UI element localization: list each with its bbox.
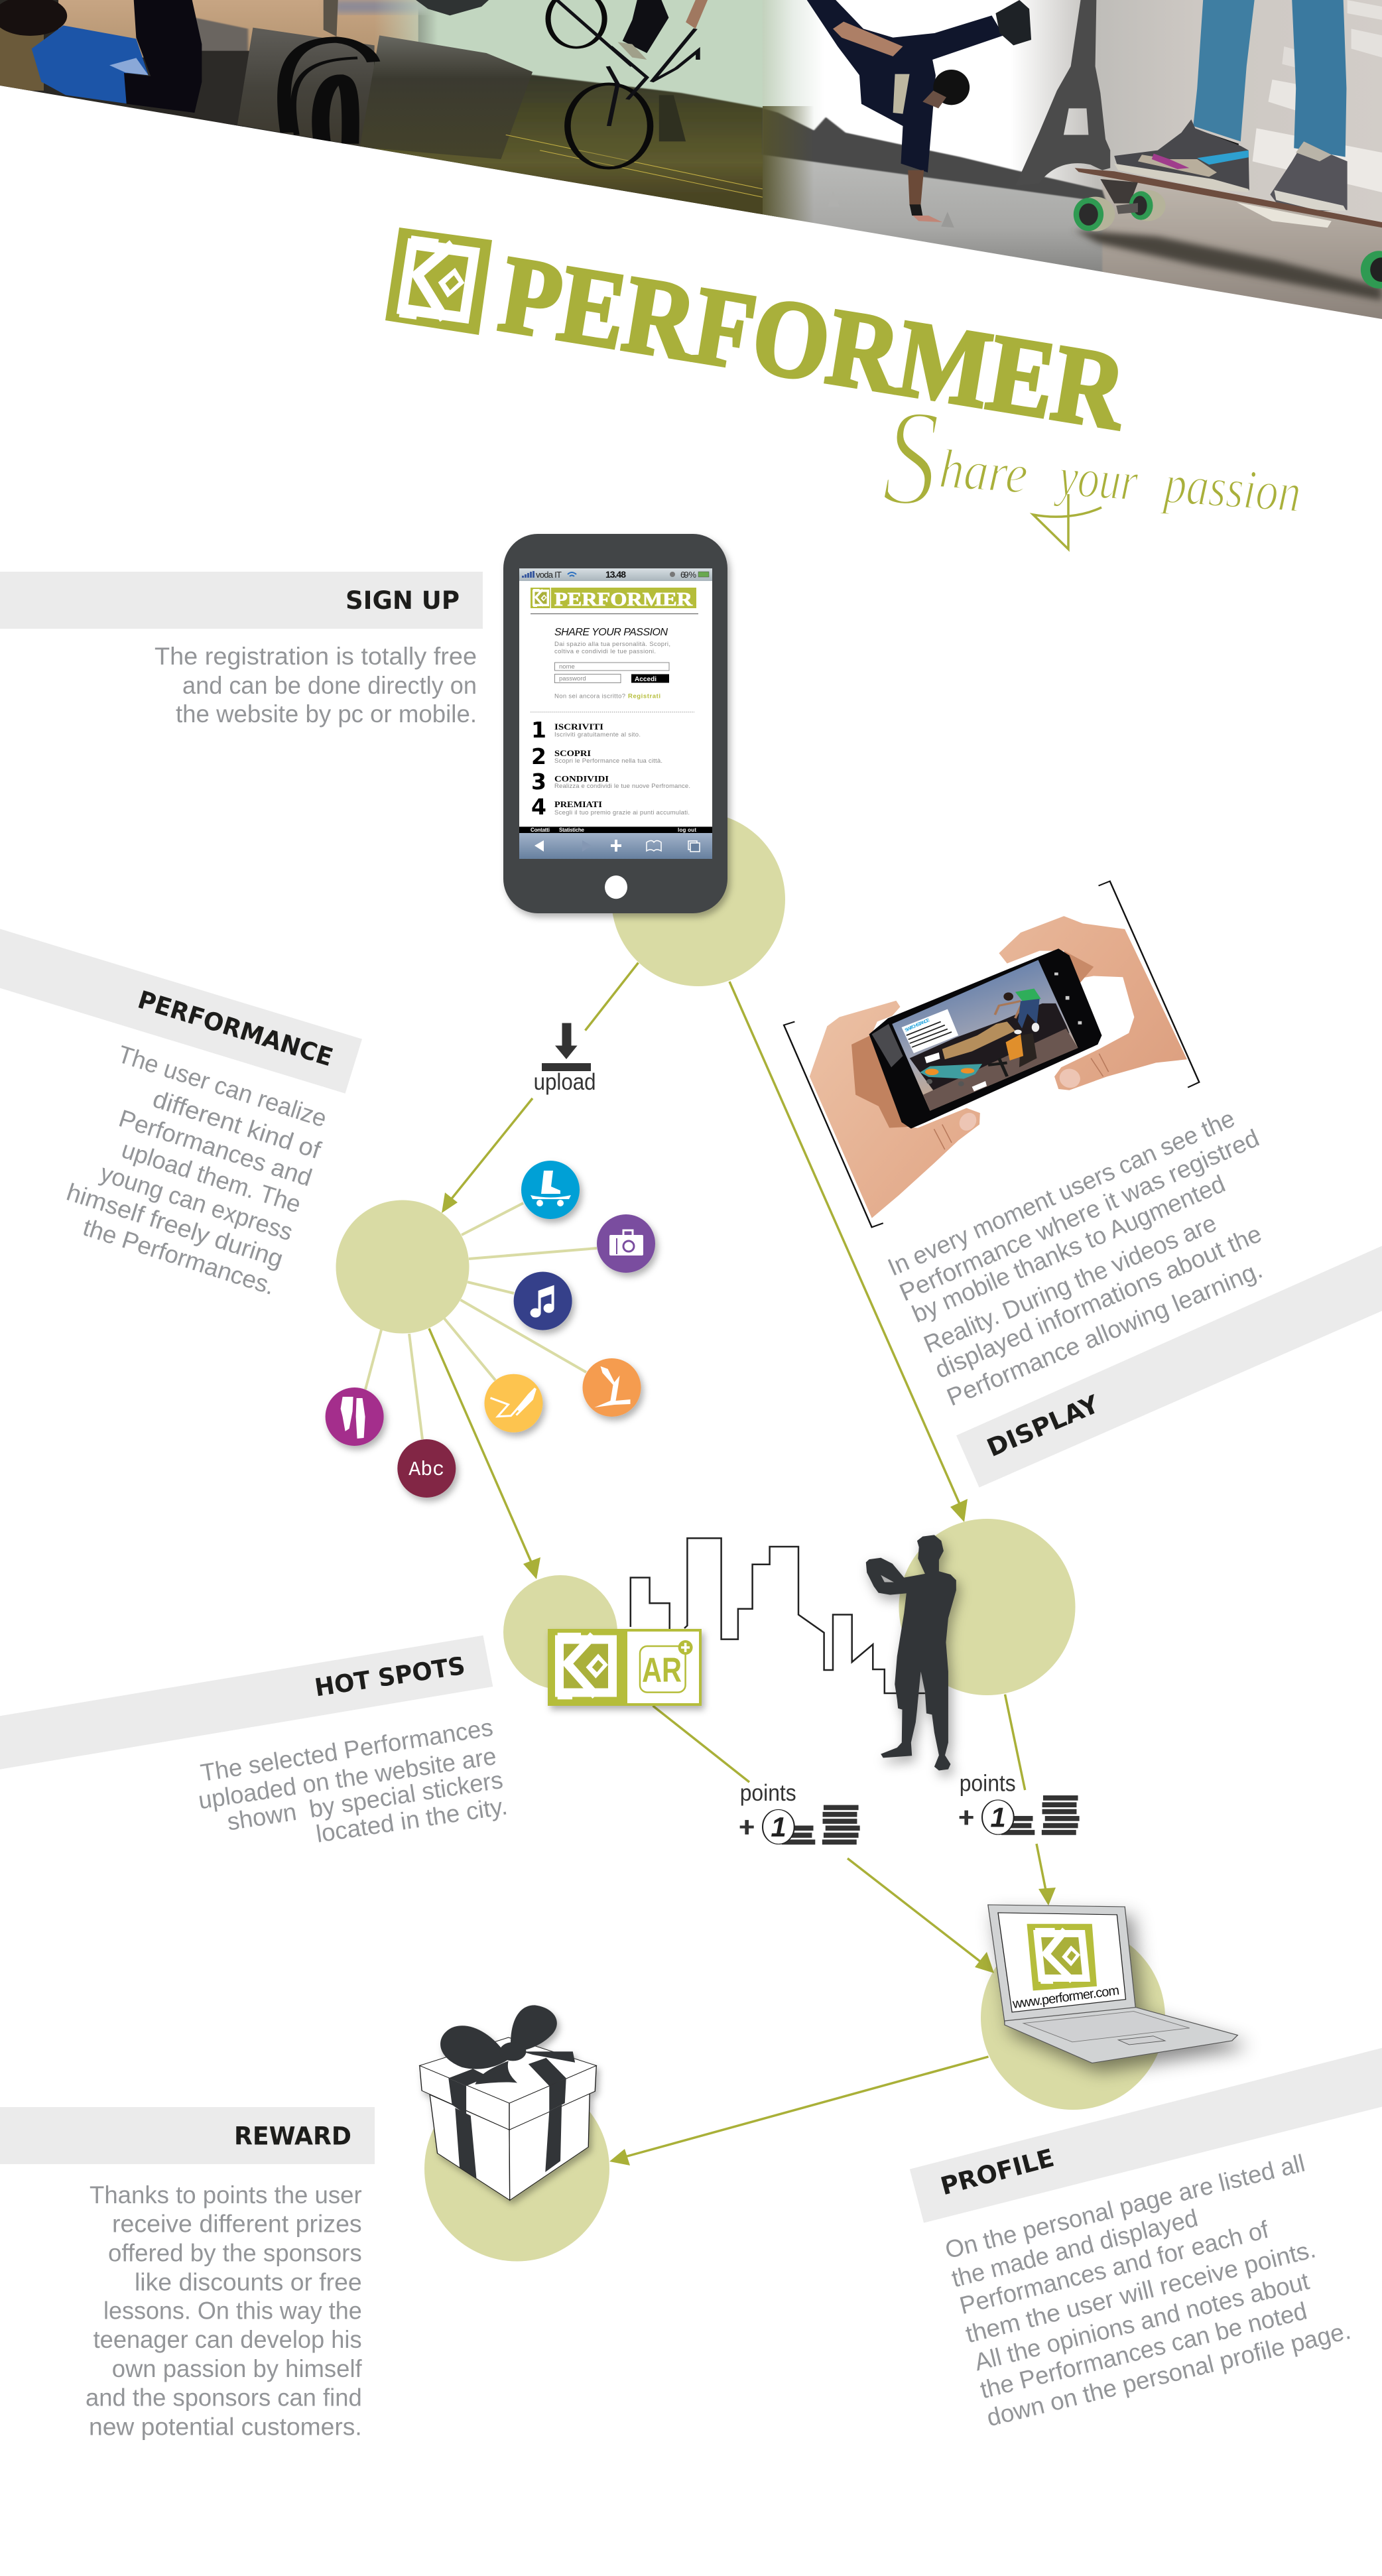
panel: display text (884, 1104, 1382, 1488)
panel: profile: them the user will receive points. (963, 2235, 1318, 2348)
smartphone with website: SCOPRI (554, 748, 591, 758)
gift box (420, 2005, 596, 2200)
panel: reward: like discounts or free (135, 2268, 362, 2295)
title: PERFORMER: PERFORMER (492, 232, 1135, 453)
icon: music (514, 1272, 572, 1330)
smartphone with website: 1 (531, 717, 546, 743)
arrow: profile to reward (609, 2057, 988, 2165)
photo: hands holding phone with augmented reality (784, 881, 1199, 1227)
icon: camera (597, 1214, 655, 1273)
panel: profile: Performances and for each of (957, 2216, 1272, 2319)
icon: upload (534, 1023, 596, 1095)
panel: hot spots: uploaded on the website are (196, 1742, 498, 1814)
panel: hot spots: HOT SPOTS (313, 1651, 467, 1702)
smartphone with website: nome (559, 663, 575, 671)
arrow: points to laptop (1036, 1844, 1056, 1905)
panel: hot spots: located in the city. (314, 1792, 509, 1848)
icon: skateboard (521, 1161, 580, 1219)
icon: painting (484, 1374, 542, 1433)
panel: sign up (0, 572, 483, 728)
panel: performance: upload them. The (119, 1135, 304, 1218)
smartphone with website: Realizza e condividi le tue nuove Perfromance. (554, 783, 690, 790)
arrow: performance to hot spots (429, 1328, 540, 1579)
panel: reward: lessons. On this way the (103, 2297, 362, 2325)
panel: profile: down on the personal profile page. (984, 2317, 1353, 2431)
tagline: Share your passion: hare (938, 438, 1030, 505)
panel: sign up: and can be done directly on (182, 672, 477, 699)
points reward icon left: 1 (771, 1811, 786, 1842)
arrow: sign up to display (729, 982, 968, 1522)
icon: ballet shoes (326, 1387, 384, 1446)
panel: reward: REWARD (234, 2122, 351, 2150)
smartphone with website: CONDIVIDI (554, 773, 609, 783)
icon: upload: upload (534, 1069, 596, 1095)
smartphone with website: Contatti (531, 827, 550, 833)
AR sticker: AR (642, 1651, 682, 1690)
panel: profile: On the personal page are listed all (942, 2150, 1308, 2264)
arrow: hot spots to points (653, 1706, 749, 1782)
points reward icon right: 1 (990, 1801, 1006, 1833)
panel: performance: The user can realize (115, 1041, 330, 1132)
icon: sport paddles (582, 1358, 641, 1417)
arrow: display to points (1005, 1695, 1025, 1790)
panel: display text: DISPLAY (983, 1389, 1104, 1462)
panel: profile (910, 2048, 1382, 2431)
photo: hands holding phone with augmented reality: SWITCH STANCE (905, 1018, 930, 1033)
tagline: Share your passion: passion (1160, 453, 1303, 524)
smartphone with website (503, 534, 727, 913)
panel: performance (0, 929, 362, 1300)
smartphone with website: Statistiche (559, 827, 585, 833)
panel: hot spots: The selected Performances (199, 1714, 495, 1787)
panel: reward (0, 2107, 375, 2440)
panel: profile: PROFILE (938, 2144, 1057, 2201)
smartphone with website: 69 % (680, 570, 696, 580)
arrow: sign up to upload (585, 963, 638, 1031)
arrow: upload to performance (442, 1098, 533, 1213)
performance category spokes (365, 1203, 597, 1439)
panel: profile: the made and displayed (949, 2204, 1200, 2292)
header photo collage (0, 0, 1382, 332)
panel: reward: receive different prizes (112, 2210, 362, 2238)
smartphone with website: 3 (531, 769, 546, 795)
panel: reward: offered by the sponsors (108, 2239, 362, 2266)
panel: sign up: The registration is totally free (155, 643, 477, 670)
silhouette of user filming (866, 1535, 956, 1770)
panel: performance: the Performances. (80, 1214, 279, 1300)
city skyline (631, 1538, 925, 1693)
panel: display text: by mobile thanks to Augmented (908, 1170, 1229, 1328)
smartphone with website: log out (678, 827, 696, 833)
process circles (336, 812, 1165, 2262)
smartphone with website: 2 (531, 743, 546, 769)
panel: display text: In every moment users can see the (884, 1104, 1239, 1281)
smartphone with website: Non sei ancora iscritto? (554, 692, 625, 700)
smartphone with website: Registrati (628, 692, 660, 700)
smartphone with website: voda IT (536, 570, 562, 580)
panel: performance: Performances and (115, 1104, 315, 1192)
panel: profile: the Performances can be noted (977, 2297, 1310, 2404)
tagline: Share your passion (880, 379, 1303, 549)
logo mark (385, 227, 492, 335)
panel: reward: Thanks to points the user (90, 2181, 362, 2209)
icon: writing (397, 1439, 456, 1498)
smartphone with website: 13.48 (605, 569, 626, 580)
panel: performance: young can express (97, 1159, 296, 1246)
points reward icon left (740, 1780, 860, 1844)
panel: display text: Reality. During the videos are (920, 1209, 1220, 1358)
smartphone with website: ISCRIVITI (554, 722, 603, 732)
arrow: points to profile (848, 1858, 994, 1973)
smartphone with website: Scopri le Performance nella tua città. (554, 757, 662, 765)
panel: profile: All the opinions and notes about (972, 2267, 1312, 2376)
panel: sign up: the website by pc or mobile. (176, 700, 477, 728)
AR sticker (548, 1629, 702, 1706)
panel: display text: Performance where it was registred (895, 1124, 1263, 1307)
smartphone with website: 4 (531, 794, 546, 820)
icon: writing: Abc (408, 1458, 444, 1482)
smartphone with website: coltiva e condividi le tue passioni. (554, 648, 656, 655)
points reward icon right: points (960, 1771, 1016, 1796)
panel: performance: PERFORMANCE (135, 986, 336, 1072)
laptop with website (988, 1905, 1237, 2063)
panel: reward: own passion by himself (112, 2355, 362, 2382)
panel: performance: different kind of (150, 1085, 324, 1164)
panel: display text: Performance allowing learning. (943, 1256, 1266, 1411)
panel: reward: teenager can develop his (94, 2326, 362, 2353)
smartphone with website: Dai spazio alla tua personalità. Scopri, (554, 641, 670, 648)
panel: sign up: SIGN UP (346, 586, 460, 615)
points reward icon left: points (740, 1780, 796, 1806)
smartphone with website: Iscriviti gratuitamente al sito. (554, 732, 641, 739)
panel: hot spots (0, 1636, 509, 1848)
panel: reward: and the sponsors can find (86, 2384, 362, 2412)
smartphone with website: Accedi (635, 676, 657, 683)
smartphone with website: SHARE YOUR PASSION (554, 627, 668, 638)
tagline: Share your passion: your (1053, 446, 1140, 513)
smartphone with website: Scegli il tuo premio grazie ai punti accumulati. (554, 809, 690, 816)
points reward icon right (960, 1771, 1080, 1835)
panel: performance: himself freely during (64, 1179, 286, 1273)
panel: hot spots: shown by special stickers (225, 1766, 505, 1836)
smartphone with website: password (559, 675, 586, 682)
smartphone with website: PREMIATI (554, 799, 602, 809)
laptop with website: www.performer.com (1011, 1983, 1120, 2012)
smartphone with website: PERFORMER (554, 589, 693, 610)
panel: reward: new potential customers. (89, 2413, 362, 2440)
panel: display text: displayed informations about the (931, 1220, 1265, 1384)
tagline: Share your passion: S (880, 379, 942, 536)
